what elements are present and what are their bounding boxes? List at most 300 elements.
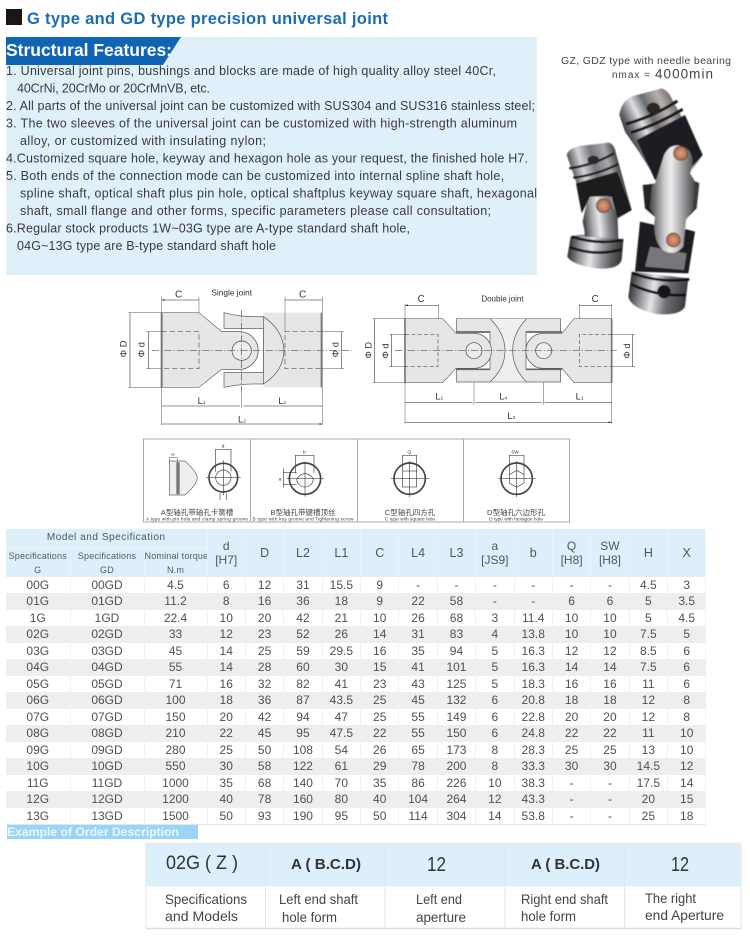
table: model and specification: 16 [258,594,271,608]
table: model and specification: 11.2 [164,594,187,608]
table: model and specification: 1GD [95,611,119,625]
diagram: B type hole [279,449,324,497]
table: model and specification: 8 [683,710,690,724]
table: model and specification: 12GD [91,792,123,806]
table: model and specification [6,529,706,825]
table: model and specification: 29.5 [330,644,353,658]
text block: feature list: 04G~13G type are B-type standard shaft hole [17,239,276,253]
table: model and specification: 13 [642,743,655,757]
table: model and specification: 18 [335,594,348,608]
table: model and specification: 40 [220,792,233,806]
table: model and specification: 04G [26,660,49,674]
table: model and specification: 13.8 [522,627,545,641]
table: model and specification: 9 [376,594,383,608]
table: model and specification: 5 [492,644,498,658]
dimension lines: single joint [128,297,344,425]
table: model and specification: 18 [680,809,693,823]
table: model and specification: [H7] [215,553,237,567]
table: model and specification: 13G [26,809,49,823]
table: model and specification: 18 [603,693,617,707]
table: model and specification: 8.5 [640,644,657,658]
table: model and specification: 7.5 [640,627,657,641]
table: model and specification: L3 [450,546,463,560]
table: model and specification: 22 [411,594,425,608]
order code descriptions: hole form [282,909,337,925]
table: model and specification: - [570,809,574,823]
table: model and specification: 12 [488,792,502,806]
order codes: 02G ( Z ) [166,853,238,874]
table: model and specification: 04GD [91,660,123,674]
table: model and specification: 160 [293,792,313,806]
text block: feature list: 5. Both ends of the connection mode can be customized into internal spline shaft hole, [6,169,504,183]
text block: feature list [6,64,537,253]
table: model and specification: 47 [335,710,348,724]
table: model and specification: 3.5 [678,594,695,608]
table: model and specification: 23 [258,627,271,641]
table: model and specification: 94 [450,644,463,658]
table: model and specification: 16 [373,644,386,658]
table: model and specification: 36 [296,594,310,608]
captions: hole types: D type with hexagon hole [489,516,543,522]
table: model and specification: 3 [492,611,498,625]
table: model and specification: 16.3 [522,644,545,658]
table: model and specification: - [493,594,497,608]
table: model and specification: 45 [411,693,425,707]
table: model and specification: C [375,546,384,560]
text block: feature list: shaft, small flange and other forms, specific parameters please call consultation; [20,204,491,218]
table: model and specification: 4.5 [640,578,657,592]
table: model and specification: Nominal torque [144,550,207,560]
table: model and specification: [H8] [561,553,583,567]
table: model and specification: 108 [293,743,313,757]
table: model and specification: 20 [258,611,271,625]
table: model and specification: 11 [642,677,655,691]
table: model and specification: 54 [335,743,348,757]
table: model and specification: 09GD [91,743,123,757]
text block: feature list: 1. Universal joint pins, bushings and blocks are made of high quality alloy steel 40Cr, [6,64,496,78]
table: model and specification: 5 [492,677,498,691]
diagram: B type hole: a [279,477,282,482]
table: model and specification: 190 [293,809,313,823]
diagram: D type hole [498,450,536,497]
order code descriptions: aperture [416,909,466,925]
table: model and specification: 01G [26,594,49,608]
table: model and specification: 104 [408,792,428,806]
drawing: double joint body [395,319,617,383]
table: model and specification: 5 [645,611,652,625]
table: model and specification: - [531,594,535,608]
table: model and specification: 15 [373,660,386,674]
text block: feature list: alloy, or customized with insulating nylon; [20,134,266,148]
table: model and specification: 68 [258,776,271,790]
table: model and specification: 25 [603,743,617,757]
table: model and specification: 12 [220,627,233,641]
panel: structural features [6,37,537,275]
text block: feature list: 2. All parts of the universal joint can be customized with SUS304 and SUS316 stainless steel; [6,99,535,113]
table: model and specification: 06GD [91,693,123,707]
order codes [166,853,689,876]
dimension labels: single joint [119,288,340,424]
table: model and specification: Q [567,539,576,553]
table: model and specification: 95 [296,726,310,740]
table: model and specification: Specifications [9,550,67,560]
table: model and specification: 150 [166,710,186,724]
order code descriptions: The right [645,890,696,906]
dimension labels: double joint: Φ D [364,342,374,359]
table: model and specification: 55 [411,710,425,724]
table: model and specification: 35 [373,776,386,790]
table: model and specification: 101 [446,660,466,674]
dimension labels: single joint: Φ d [136,342,146,357]
photo: large double joint [619,88,703,314]
title: G type and GD type precision universal joint [27,10,388,28]
table: model and specification: 226 [446,776,466,790]
text block: feature list: spline shaft, optical shaft plus pin hole, optical shaftplus keyway square shaft, hexagonal [20,186,537,200]
text block: needle bearing note: 4000min [655,66,713,82]
table: model and specification: 10 [680,726,693,740]
table: model and specification: 02GD [91,627,123,641]
table: model and specification: 45 [258,726,271,740]
table: model and specification: 23 [373,677,386,691]
table: model and specification: 38.3 [522,776,545,790]
table: model and specification: 22.4 [164,611,187,625]
table: model and specification: 29 [373,759,386,773]
table: model and specification: 32 [258,677,271,691]
table: model and specification: 55 [169,660,182,674]
table: model and specification: 10 [565,611,578,625]
table: model and specification: 25 [258,644,271,658]
table: model and specification: 03G [26,644,49,658]
table: model and specification: SW [600,539,620,553]
table: model and specification: 43.5 [330,693,353,707]
table: model and specification: 4.5 [167,578,184,592]
table: model and specification: 11.4 [522,611,544,625]
table: model and specification: 25 [565,743,578,757]
drawing: single joint body [152,310,352,392]
table: model and specification: 26 [335,627,348,641]
table: model and specification: 14 [680,776,693,790]
table: model and specification: 11GD [92,776,122,790]
order code descriptions: end Aperture [645,907,724,923]
table: model and specification: 16 [603,677,617,691]
diagram: A type hole: H [171,452,174,457]
table: model and specification: - [608,776,612,790]
table: model and specification: 12G [26,792,49,806]
dimension labels: double joint: C [592,294,599,305]
table: model and specification: 550 [166,759,186,773]
diagram: C type hole [391,449,429,497]
table: model and specification: 304 [446,809,466,823]
table: model and specification: 83 [450,627,463,641]
table: model and specification: 65 [411,743,425,757]
table: model and specification: 15 [680,792,693,806]
table: model and specification: 87 [296,693,310,707]
table: model and specification: 12 [680,759,693,773]
table: model and specification: 1G [30,611,46,625]
captions: hole types [146,507,545,522]
table: model and specification: 25 [642,809,655,823]
table: model and specification: 24.8 [522,726,545,740]
table: model and specification: 3 [683,578,690,592]
table: model and specification: 60 [296,660,310,674]
dimension labels: double joint: L3 [507,411,516,421]
table: model and specification: 03GD [91,644,123,658]
table: model and specification: 21 [335,611,348,625]
table: model and specification: 42 [258,710,271,724]
diagram: C type hole: Q [407,449,411,455]
table: model and specification: 00GD [91,578,123,592]
table: model and specification: 31 [296,578,310,592]
table: model and specification: 125 [446,677,466,691]
captions: hole types: A型轴孔带轴孔卡簧槽 [161,507,234,517]
captions: hole types: B type with key groove and Tightening screw [252,516,354,522]
table: model and specification: 10 [373,611,386,625]
table: model and specification: 10G [26,759,49,773]
captions: hole types: A type with pin hole and clamp spring groove [146,516,248,522]
text block: needle bearing note: GZ, GDZ type with needle bearing [561,55,731,67]
diagram: single joint [119,288,352,425]
table: model and specification: 22 [603,726,617,740]
captions: hole types: C type with square hole [385,516,435,522]
table: model and specification: 8 [683,693,690,707]
dimension lines: double joint [373,304,635,423]
table: model and specification: a [492,539,498,553]
table: model and specification: 210 [166,726,186,740]
table: model and specification: 5 [492,660,498,674]
table: model and specification: 08GD [91,726,123,740]
dimension labels: single joint: L2 [238,414,246,424]
table: model and specification: 114 [409,809,428,823]
table: model and specification: 52 [296,627,310,641]
order codes: A ( B.C.D) [531,856,600,873]
order code descriptions: Specifications [165,891,247,907]
table: model and specification: 5 [683,627,690,641]
table: model and specification: 25 [373,710,386,724]
table: model and specification: 31 [411,627,425,641]
table: model and specification: 33 [169,627,182,641]
table: model and specification: 30 [220,759,233,773]
table: model and specification: - [570,776,574,790]
table: model and specification: 18 [220,693,233,707]
table: model and specification: 1200 [162,792,189,806]
heading: structural features: Structural Features: [6,40,172,60]
table: model and specification: d [223,539,230,553]
text block: feature list: 3. The two sleeves of the universal joint can be customized with high-strength aluminum [6,116,517,130]
product photo: universal joints [567,88,703,314]
table: model and specification: 8 [492,759,498,773]
table: model and specification: 43.3 [522,792,545,806]
table: model and specification: 25 [373,693,386,707]
table: model and specification: 14 [220,660,233,674]
table: model and specification: 16 [220,677,233,691]
table: model and specification: 53.8 [522,809,545,823]
table: model and specification: 14 [220,644,233,658]
table: model and specification: 20 [565,710,578,724]
dimension labels: double joint: C [418,294,425,305]
order code descriptions: Left end shaft [279,891,358,907]
table: model and specification: 280 [166,743,186,757]
diagram: B type hole: b [303,449,306,455]
table: model and specification: 16.3 [522,660,545,674]
panel: order description table [146,843,741,928]
table: model and specification: 14 [488,809,502,823]
table: model and specification: - [493,578,497,592]
table: model and specification: D [260,546,269,560]
heading: structural features [6,37,181,65]
table: model and specification: 86 [411,776,425,790]
dimension labels: double joint: L4 [499,392,508,402]
table: model and specification: 6 [568,594,575,608]
dimension labels: single joint: C [299,289,306,300]
table: model and specification: 6 [683,660,690,674]
table: model and specification: 122 [293,759,313,773]
table: model and specification: 150 [446,726,466,740]
table: model and specification: - [454,578,458,592]
dimension labels: single joint: L1 [278,396,287,406]
table: model and specification: - [570,578,574,592]
table: model and specification: 09G [26,743,49,757]
table: model and specification: 05GD [91,677,123,691]
dimension labels: single joint: Single joint [211,288,253,298]
dimension labels: single joint: Φ D [119,340,129,357]
table: model and specification: 14 [603,660,617,674]
diagram: double joint [364,294,635,423]
table: model and specification: 8 [492,743,498,757]
table: model and specification: 15.5 [330,578,353,592]
table: model and specification: 10 [220,611,233,625]
table: model and specification: 00G [26,578,49,592]
table: model and specification: 132 [446,693,466,707]
table: model and specification: 30 [603,759,617,773]
order codes: 12 [427,854,446,876]
dimension labels: double joint: L1 [435,392,444,402]
table: model and specification: 149 [446,710,466,724]
order code descriptions: Right end shaft [521,891,608,907]
text block: needle bearing note [561,55,731,82]
table: model and specification: 5 [645,594,652,608]
table: model and specification: 11 [642,726,655,740]
table: model and specification: 07G [26,710,49,724]
table: model and specification: 14 [565,660,578,674]
text block: feature list: 40CrNi, 20CrMo or 20CrMnVB, etc. [17,82,210,96]
table: model and specification: 22 [220,726,233,740]
dimension labels: double joint: Φ d [380,343,390,359]
table: model and specification: 6 [492,710,498,724]
table: model and specification: 28 [258,660,271,674]
order codes: A ( B.C.D) [291,856,361,873]
table: model and specification: 1500 [162,809,189,823]
table: model and specification: 4.5 [678,611,695,625]
dimension labels: double joint [364,294,632,421]
table: model and specification: 14.5 [637,759,660,773]
dimension labels: single joint: Φ d [330,342,340,357]
table: model and specification: 6 [683,677,690,691]
table: model and specification: 6 [683,644,690,658]
table: model and specification: 20.8 [522,693,545,707]
order code descriptions: Left end [416,891,462,907]
table: model and specification: Model and Specification [47,532,166,543]
table: model and specification: GD [100,564,114,574]
table: model and specification: 05G [26,677,49,691]
table: model and specification: 12 [642,710,655,724]
icon: black title square [6,9,22,25]
table: model and specification: 50 [220,809,233,823]
text block: needle bearing note: nmax = [612,70,650,81]
table: model and specification: 50 [258,743,271,757]
table: model and specification: 45 [169,644,182,658]
diagram: A type hole: d [222,444,225,450]
table: model and specification: 58 [258,759,271,773]
table: model and specification: 6 [607,594,613,608]
table: model and specification: 10GD [91,759,123,773]
captions: hole types: D型轴孔六边形孔 [487,507,545,517]
table: model and specification: 12 [603,644,617,658]
heading: example of order description: Example of Order Description [7,825,179,839]
table: model and specification: - [531,578,535,592]
table: model and specification: 20 [603,710,617,724]
table: model and specification: 35 [411,644,425,658]
order codes: 12 [671,854,689,876]
table: model and specification: [H8] [599,553,621,567]
table: model and specification: 17.5 [637,776,660,790]
table: model and specification: 06G [26,693,49,707]
dimension labels: single joint: L1 [198,396,206,406]
table: model and specification: b [530,546,537,560]
dimension labels: double joint: Φ d [622,343,632,359]
table: model and specification: 100 [166,693,186,707]
table: model and specification: 07GD [91,710,123,724]
table: model and specification: 173 [446,743,466,757]
table: model and specification: 10 [680,743,693,757]
dimension labels: double joint: Double joint [481,294,524,303]
table: model and specification: 41 [411,660,425,674]
table: model and specification: 11G [27,776,49,790]
table: model and specification: 01GD [91,594,123,608]
table: model and specification: 140 [293,776,313,790]
text block: feature list: 6.Regular stock products 1W~03G type are A-type standard shaft hole, [6,222,410,236]
table: model and specification: 36 [258,693,271,707]
dimension labels: single joint: C [175,289,182,300]
table: model and specification: 16 [565,677,578,691]
text block: feature list: 4.Customized square hole, keyway and hexagon hole as your request, the finished hole H7. [6,152,528,166]
table: model and specification: L1 [334,546,348,560]
table: model and specification: 08G [26,726,49,740]
diagram: D type hole: SW [511,450,519,455]
table: model and specification: 10 [603,611,617,625]
table: model and specification: 14 [373,627,386,641]
table: model and specification: 200 [446,759,466,773]
table: model and specification: 40 [373,792,386,806]
dimension labels: double joint: L1 [576,392,584,402]
table: model and specification: 9 [376,578,383,592]
table: model and specification: L4 [411,546,425,560]
table: model and specification: 7.5 [640,660,657,674]
table: model and specification: 61 [335,759,348,773]
table: model and specification: 6 [492,693,498,707]
table: model and specification: [JS9] [481,553,509,567]
table: model and specification: G [34,564,41,574]
table: model and specification: 95 [335,809,348,823]
table: model and specification: X [683,546,691,560]
table: model and specification: 33.3 [522,759,545,773]
captions: hole types: B型轴孔带键槽顶丝 [270,507,336,517]
table: model and specification: 47.5 [330,726,353,740]
table: model and specification: H [644,546,653,560]
table: model and specification: - [416,578,420,592]
table: model and specification: 12 [642,693,655,707]
table: model and specification: 6 [223,578,230,592]
table: model and specification: 20 [642,792,655,806]
